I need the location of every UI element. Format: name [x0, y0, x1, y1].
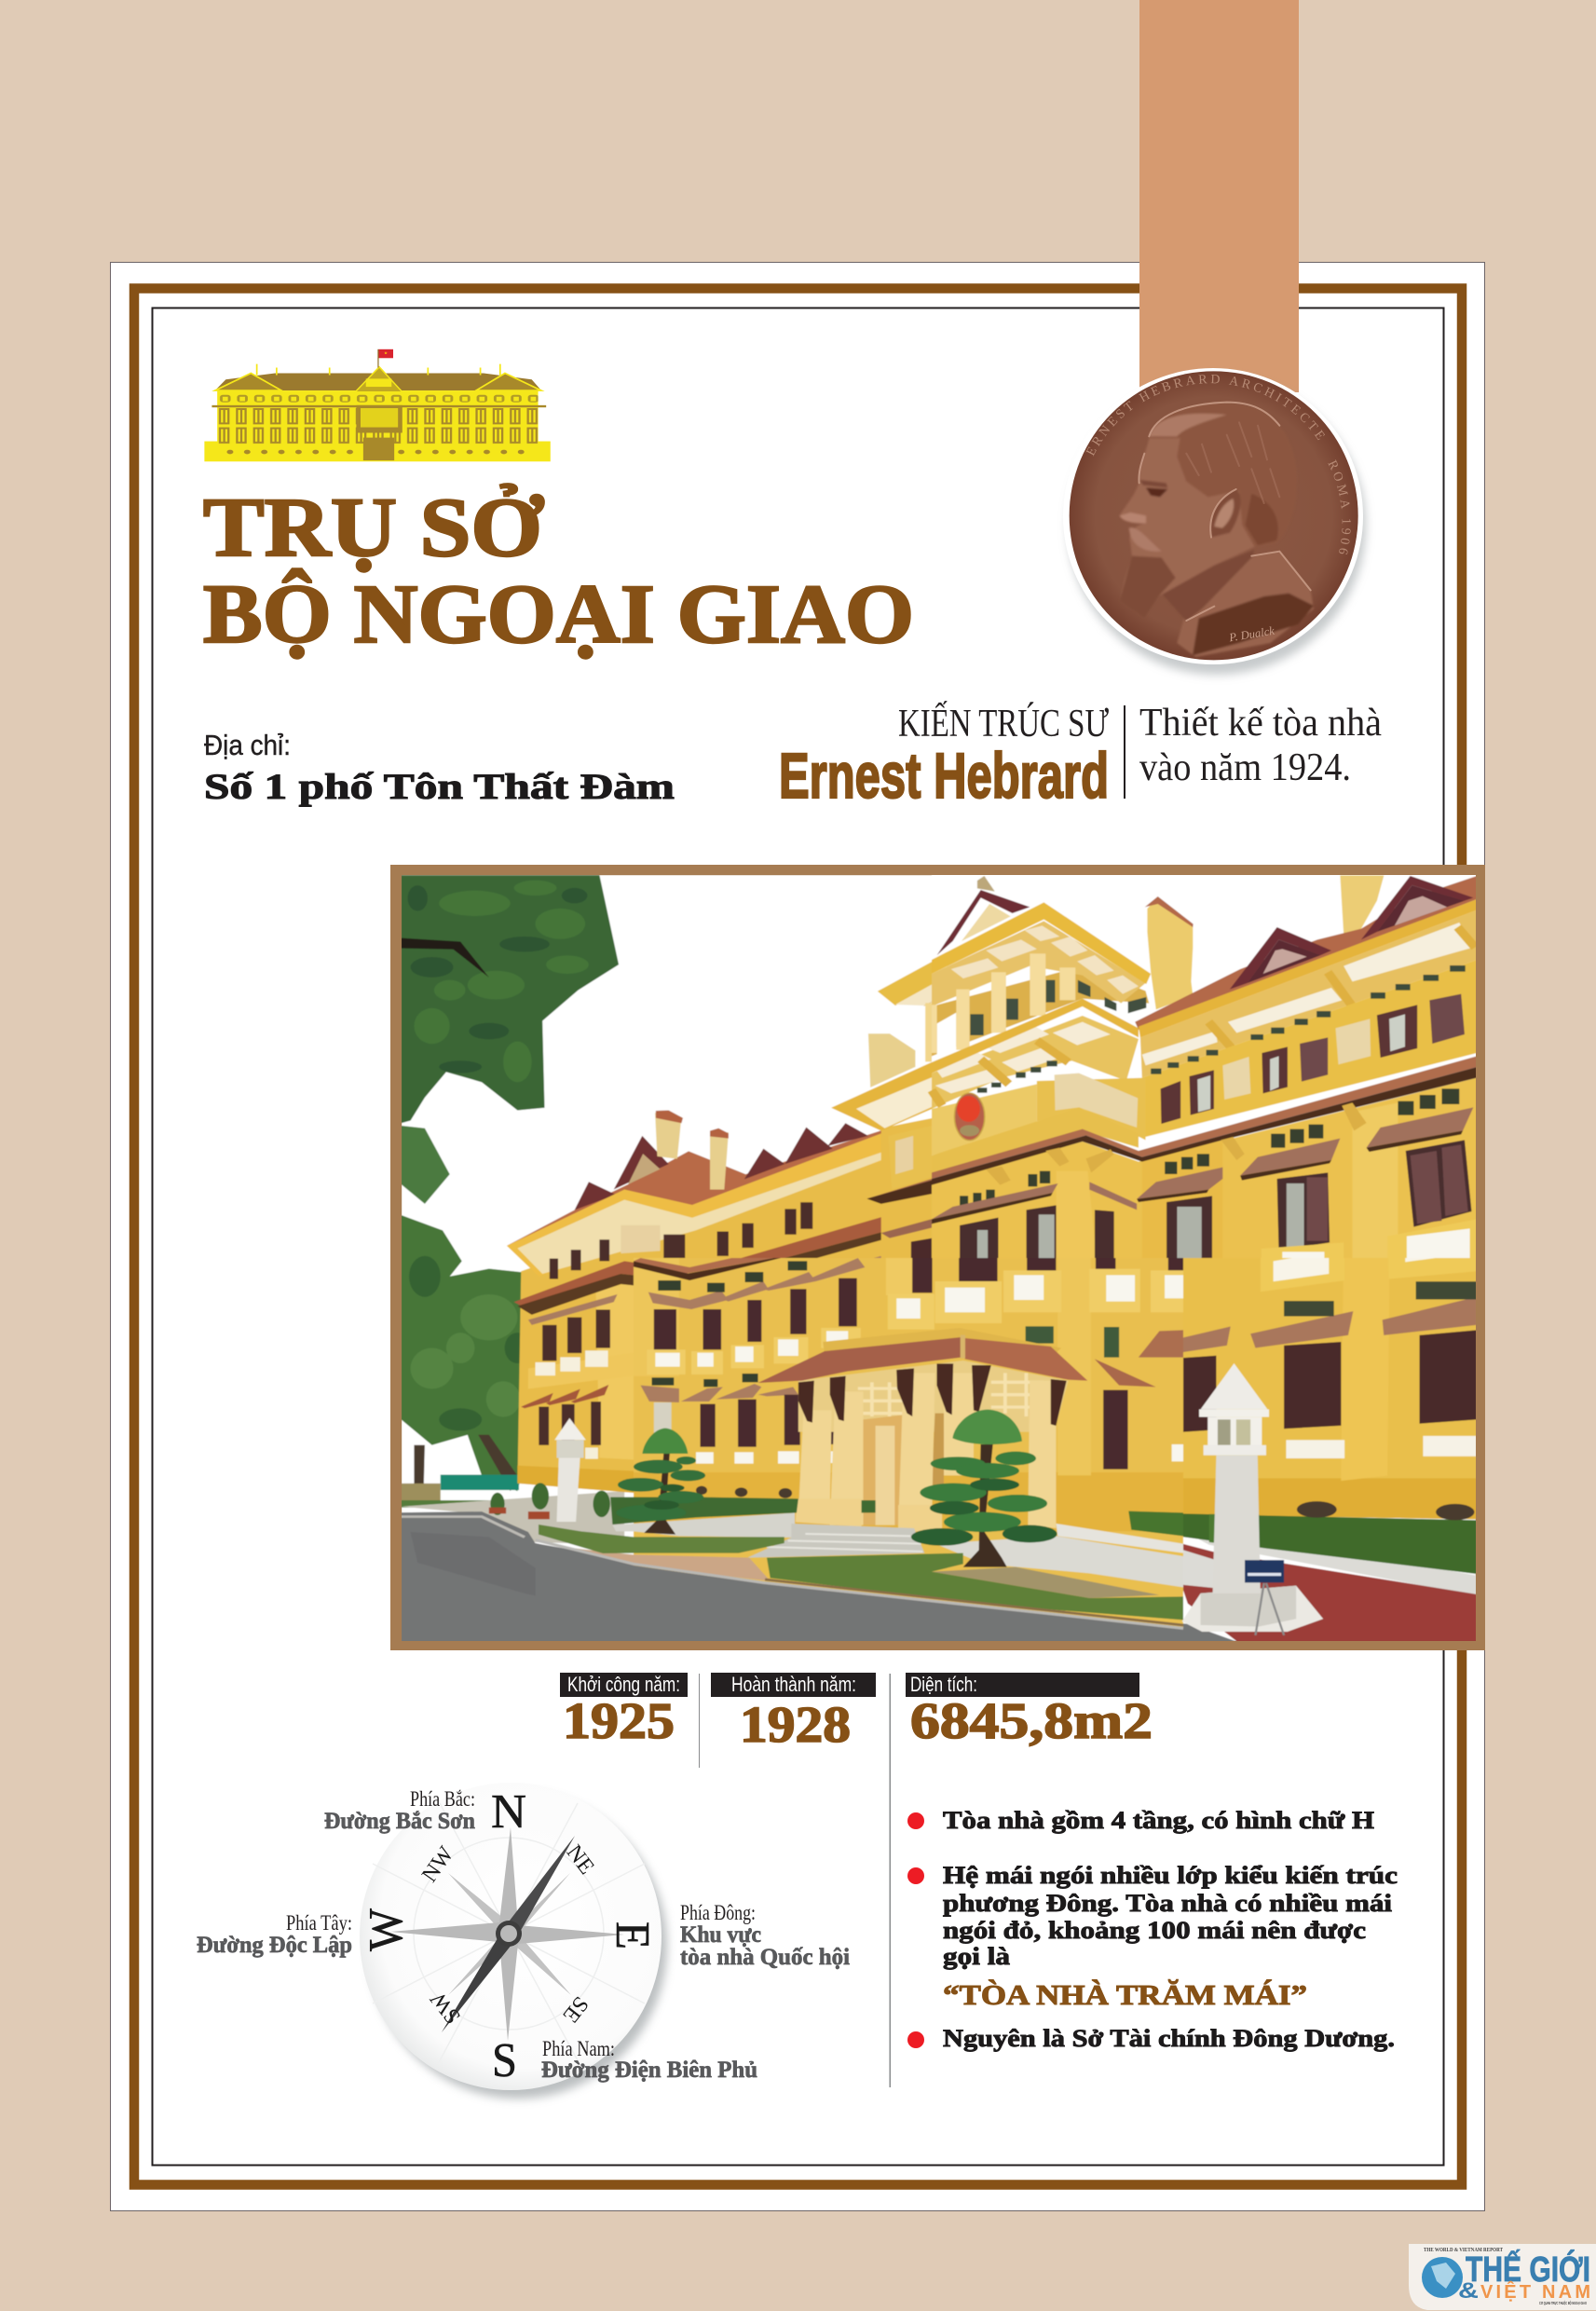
small lantern [554, 1418, 586, 1522]
large windows [960, 1140, 1471, 1258]
porch brackets [798, 1363, 1067, 1426]
photo frame [390, 865, 1485, 1650]
label: south: Đường Điện Biên Phủ [541, 2058, 757, 2083]
title: TRỤ SỞ [203, 482, 544, 574]
compass needle [442, 1836, 575, 2032]
balconies [647, 1269, 1183, 1374]
design note: vào năm 1924. [1139, 746, 1351, 789]
medal inscription [1085, 375, 1351, 644]
lower pavilion roof [932, 1016, 1139, 1109]
large lantern [1182, 1363, 1323, 1632]
coat of arms [954, 1093, 985, 1141]
title [203, 482, 914, 661]
fact: history: Nguyên là Sở Tài chính Đông Dương. [943, 2025, 1395, 2052]
long tile eaves [932, 1056, 1477, 1179]
relief highlights [1139, 403, 1311, 621]
label: south [541, 2037, 757, 2083]
compass [360, 1783, 667, 2099]
side awnings [1095, 1359, 1156, 1387]
stat: floor area [906, 1673, 1153, 1749]
ramps and steps [612, 1512, 795, 1538]
compass shadow [369, 1793, 667, 2099]
design note [1139, 702, 1382, 789]
awnings upper row [641, 1258, 865, 1402]
label: north: Phía Bắc: [410, 1787, 475, 1811]
title: BỘ NGOẠI GIAO [203, 567, 914, 661]
medal white rim [1063, 368, 1363, 664]
low hedges and lawn [539, 1525, 784, 1553]
chimneys [1340, 875, 1384, 934]
left wing walls [516, 1161, 882, 1472]
upper right of building [932, 867, 1485, 1258]
architect block [779, 701, 1382, 812]
orange hanging strip [1139, 0, 1299, 392]
label: north [324, 1787, 475, 1834]
porch interior [798, 1361, 1069, 1432]
lattice windows [960, 1088, 1459, 1206]
address: Địa chỉ: [204, 729, 291, 761]
label: east: Khu vực [680, 1922, 761, 1948]
dormers [1230, 927, 1331, 990]
white card [110, 263, 1485, 2210]
plinth [634, 1472, 1183, 1531]
vents [977, 965, 1466, 1093]
balconies [1387, 1219, 1477, 1258]
stat: completion year: 1928 [740, 1696, 851, 1753]
bullet: roofs [907, 1867, 924, 1884]
porch roof [758, 1337, 962, 1383]
label: west: Phía Tây: [286, 1911, 352, 1935]
pine centre [911, 1410, 1057, 1567]
stat: floor area: 6845,8m2 [910, 1692, 1153, 1749]
fact list [907, 1807, 1398, 2052]
nickname: “TÒA NHÀ TRĂM MÁI” [943, 1978, 1307, 2011]
upper eaves [634, 1258, 774, 1274]
arched base windows [696, 1486, 792, 1498]
design note: Thiết kế tòa nhà [1139, 702, 1382, 745]
photo: ministry building [402, 867, 1485, 1649]
compass letters: NE [562, 1840, 599, 1879]
right ramp, red drive and hedge [1182, 1500, 1476, 1641]
central wall [880, 1118, 933, 1259]
medal inscription: ERNEST HEBRARD ARCHITECTE [1085, 375, 1325, 457]
label: south: Phía Nam: [542, 2037, 615, 2060]
small lattice windows [1284, 1281, 1477, 1317]
upper windows [1161, 994, 1465, 1124]
compass star [390, 1827, 624, 2041]
stat: floor area: Diện tích: [910, 1673, 977, 1696]
trees [402, 875, 619, 1508]
fact: roofs: phương Đông. Tòa nhà có nhiều mái [943, 1890, 1392, 1917]
fact: roofs: ngói đỏ, khoảng 100 mái nên được [943, 1917, 1366, 1944]
outer brown frame [134, 289, 1462, 2184]
compass letters [360, 1785, 659, 2087]
head [1176, 401, 1224, 412]
left wing balconies and awnings [521, 1350, 608, 1459]
central pavilion [831, 962, 933, 1175]
medal shadow [1068, 376, 1366, 675]
fact: floors and shape: Tòa nhà gồm 4 tầng, có hình chữ H [943, 1807, 1374, 1834]
compass spokes [373, 1803, 645, 2064]
right lower wing [1182, 1257, 1476, 1641]
divider [1124, 705, 1125, 799]
label: west [197, 1911, 352, 1958]
label: east [680, 1901, 850, 1970]
vertical dividers [699, 1674, 891, 2087]
right eaves [1140, 910, 1477, 1078]
hair strokes [1186, 422, 1279, 503]
label: west: Đường Độc Lập [197, 1933, 352, 1958]
globe [1422, 2257, 1463, 2298]
medal portrait [1063, 368, 1371, 679]
publisher logo: THE WORLD & VIETNAM REPORT [1424, 2248, 1503, 2253]
stat: completion year: Hoàn thành năm: [731, 1673, 856, 1696]
publisher logo: & [1458, 2278, 1479, 2304]
pavilion [932, 966, 1149, 1056]
fact: roofs: gọi là [943, 1943, 1010, 1970]
medal inscription: P. Dualck [1227, 624, 1275, 644]
windows [654, 1258, 1183, 1470]
label: east: tòa nhà Quốc hội [680, 1945, 850, 1970]
bullet: floors [907, 1812, 924, 1829]
balcony and vents [1261, 1257, 1476, 1459]
icon: building logo [204, 349, 551, 461]
patterned panels [1222, 1019, 1371, 1100]
plants at foot of left wing [489, 1483, 610, 1519]
brackets [986, 1102, 1367, 1185]
stat: start year: 1925 [563, 1692, 675, 1749]
stat: completion year [711, 1673, 876, 1753]
porch door and columns [863, 1415, 904, 1525]
lower awnings [1183, 1299, 1476, 1353]
lower centre of building [536, 1258, 1183, 1649]
fact: roofs: Hệ mái ngói nhiều lớp kiểu kiến trúc [943, 1862, 1398, 1889]
vents [696, 1444, 1183, 1464]
pavement [564, 1547, 771, 1581]
publisher logo [1409, 2244, 1596, 2310]
medal disc and relief [1070, 371, 1358, 660]
awnings [932, 1107, 1473, 1219]
label: east: Phía Đông: [680, 1901, 756, 1924]
medal inscription: ROMA 1906 [1328, 459, 1351, 554]
compass letters: W [360, 1908, 413, 1951]
address [204, 729, 675, 807]
fact: roofs [943, 1862, 1398, 1970]
central eaves and windows [866, 1178, 933, 1259]
label: north: Đường Bắc Sơn [324, 1809, 475, 1834]
right wall upper [1142, 960, 1477, 1137]
back hedges [610, 1497, 798, 1525]
inner thin frame [153, 308, 1444, 2166]
entrance sign [1245, 1560, 1284, 1635]
tiled roof [1135, 876, 1477, 1030]
architect name: Ernest Hebrard [779, 740, 1109, 812]
bullet: history [907, 2031, 924, 2048]
architect label: KIẾN TRÚC SƯ [898, 701, 1109, 745]
address: Số 1 phố Tôn Thất Đàm [204, 767, 675, 807]
porch parapet [823, 1328, 1061, 1358]
compass letters: SW [426, 1987, 466, 2028]
left wing windows [539, 1202, 813, 1446]
road [536, 1543, 1183, 1649]
left wing roof and dormers [507, 1111, 888, 1325]
lower walls [932, 1078, 1477, 1258]
compass letters: SE [558, 1991, 593, 2027]
ground and road [402, 1491, 1237, 1642]
lower windows [1177, 1330, 1477, 1432]
compass letters: N [491, 1785, 526, 1839]
compass letters: S [492, 2034, 517, 2087]
jacket [1177, 552, 1314, 657]
publisher logo: VIỆT NAM [1480, 2280, 1590, 2303]
stat: start year [560, 1673, 688, 1749]
stat: start year: Khởi công năm: [567, 1673, 680, 1696]
compass letters: E [606, 1921, 659, 1949]
compass dial [360, 1783, 662, 2090]
compass letters: NW [417, 1842, 459, 1887]
pine left [616, 1429, 705, 1535]
lanterns and entrance sign [554, 1363, 1323, 1635]
